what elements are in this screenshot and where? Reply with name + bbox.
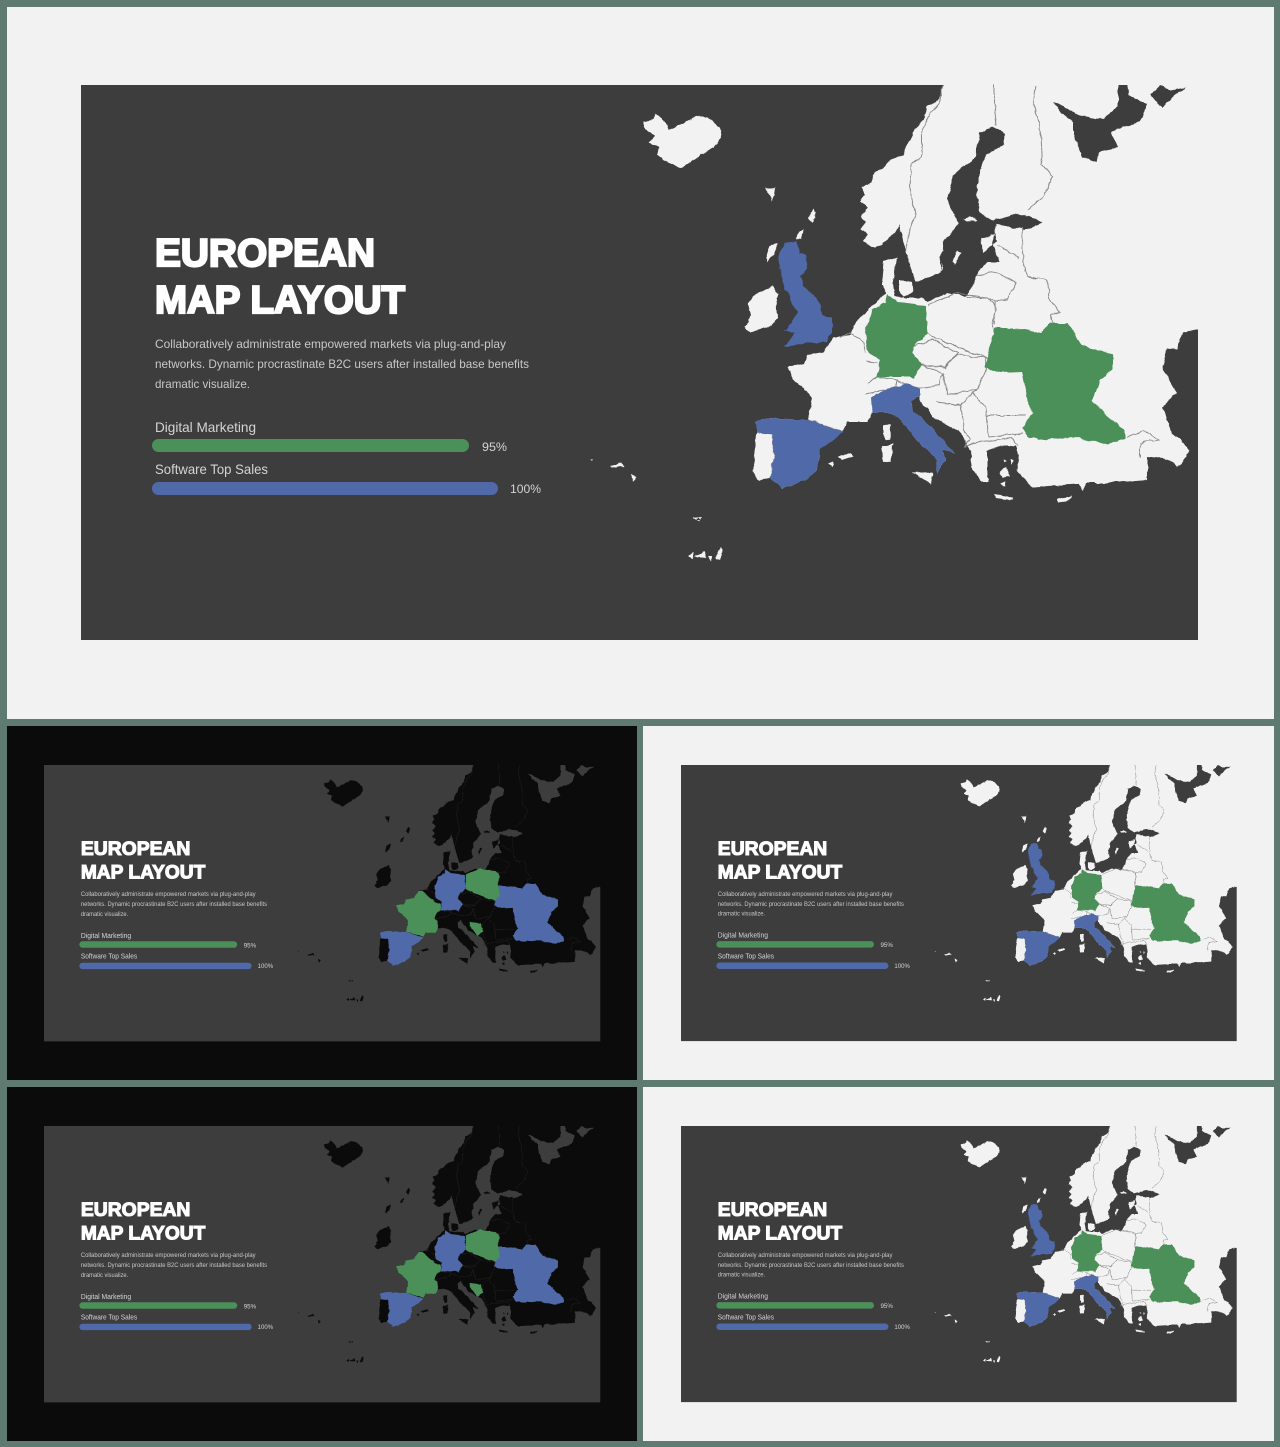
progress: digital marketing: 95% <box>880 1304 894 1310</box>
progress: software top sales: Software Top Sales <box>81 954 138 961</box>
title <box>81 838 205 884</box>
title: EUROPEAN <box>81 1199 190 1221</box>
progress: software top sales <box>716 1315 911 1331</box>
description: dramatic visualize. <box>718 1273 765 1279</box>
progress: software top sales <box>79 954 274 970</box>
progress: software top sales: Software Top Sales <box>155 461 268 477</box>
progress: digital marketing: Digital Marketing <box>81 1294 131 1301</box>
description: networks. Dynamic procrastinate B2C users after installed base benefits <box>718 902 904 908</box>
description: dramatic visualize. <box>718 912 765 918</box>
dark panel <box>81 85 1198 640</box>
description <box>155 337 529 391</box>
progress: digital marketing: Digital Marketing <box>718 1294 768 1301</box>
description: networks. Dynamic procrastinate B2C users after installed base benefits <box>718 1263 904 1269</box>
dark panel <box>44 1126 600 1402</box>
map of Europe <box>298 1124 603 1363</box>
thumbnail: light top right <box>643 726 1274 1080</box>
thumbnail: dark top left <box>7 726 637 1080</box>
description: Collaboratively administrate empowered markets via plug-and-play <box>81 892 256 898</box>
thumbnail: dark bottom left <box>7 1087 637 1441</box>
title: MAP LAYOUT <box>81 862 205 884</box>
title <box>718 1199 842 1244</box>
title: EUROPEAN <box>81 838 190 860</box>
description <box>718 1253 904 1279</box>
progress: digital marketing <box>716 1294 894 1310</box>
slide background <box>7 1087 637 1441</box>
description: Collaboratively administrate empowered markets via plug-and-play <box>155 337 506 351</box>
dark panel <box>681 765 1237 1041</box>
map of Europe <box>935 763 1239 1002</box>
title: EUROPEAN <box>155 232 375 275</box>
description <box>81 892 267 918</box>
description: dramatic visualize. <box>81 1273 128 1279</box>
progress: digital marketing: Digital Marketing <box>81 933 131 940</box>
description: Collaboratively administrate empowered markets via plug-and-play <box>718 892 892 898</box>
map of Europe <box>935 1124 1239 1363</box>
progress: software top sales: 100% <box>258 1325 274 1331</box>
description: Collaboratively administrate empowered markets via plug-and-play <box>718 1253 892 1259</box>
progress: software top sales <box>79 1315 274 1331</box>
title: MAP LAYOUT <box>718 1222 842 1244</box>
progress: software top sales: 100% <box>258 964 274 970</box>
dark panel <box>44 765 600 1041</box>
description: dramatic visualize. <box>155 377 250 391</box>
description <box>718 892 904 918</box>
progress: software top sales: Software Top Sales <box>81 1315 138 1322</box>
title <box>718 838 842 883</box>
slide background <box>643 1087 1274 1441</box>
slide background <box>7 726 637 1080</box>
dark panel <box>681 1126 1237 1402</box>
progress: digital marketing <box>79 933 257 949</box>
progress: digital marketing: Digital Marketing <box>718 933 768 940</box>
description: networks. Dynamic procrastinate B2C users after installed base benefits <box>81 1263 267 1269</box>
map of Europe <box>591 80 1203 561</box>
progress: digital marketing: 95% <box>482 440 507 454</box>
progress: software top sales <box>152 461 541 496</box>
title <box>155 232 405 322</box>
description: Collaboratively administrate empowered markets via plug-and-play <box>81 1253 256 1259</box>
progress: software top sales <box>716 954 911 970</box>
progress: digital marketing <box>79 1294 257 1310</box>
progress: digital marketing: Digital Marketing <box>155 419 256 435</box>
progress: software top sales: 100% <box>894 964 911 970</box>
title: MAP LAYOUT <box>81 1223 205 1245</box>
slide background <box>643 726 1274 1080</box>
progress: digital marketing: 95% <box>244 943 257 949</box>
thumbnail: light bottom right <box>643 1087 1274 1441</box>
title: EUROPEAN <box>718 1199 827 1221</box>
progress: software top sales: 100% <box>510 482 541 496</box>
slide background <box>7 7 1274 719</box>
description: dramatic visualize. <box>81 912 128 918</box>
progress: digital marketing: 95% <box>244 1304 257 1310</box>
title: MAP LAYOUT <box>718 861 842 883</box>
main slide <box>7 7 1274 719</box>
title: MAP LAYOUT <box>155 279 405 322</box>
progress: software top sales: Software Top Sales <box>718 954 775 961</box>
title: EUROPEAN <box>718 838 827 860</box>
description: networks. Dynamic procrastinate B2C users after installed base benefits <box>81 902 267 908</box>
progress: software top sales: Software Top Sales <box>718 1315 775 1322</box>
progress: digital marketing: 95% <box>880 943 894 949</box>
progress: digital marketing <box>152 419 507 454</box>
progress: software top sales: 100% <box>894 1325 911 1331</box>
description <box>81 1253 267 1279</box>
progress: digital marketing <box>716 933 894 949</box>
description: networks. Dynamic procrastinate B2C users after installed base benefits <box>155 357 529 371</box>
map of Europe <box>298 763 603 1002</box>
title <box>81 1199 205 1245</box>
